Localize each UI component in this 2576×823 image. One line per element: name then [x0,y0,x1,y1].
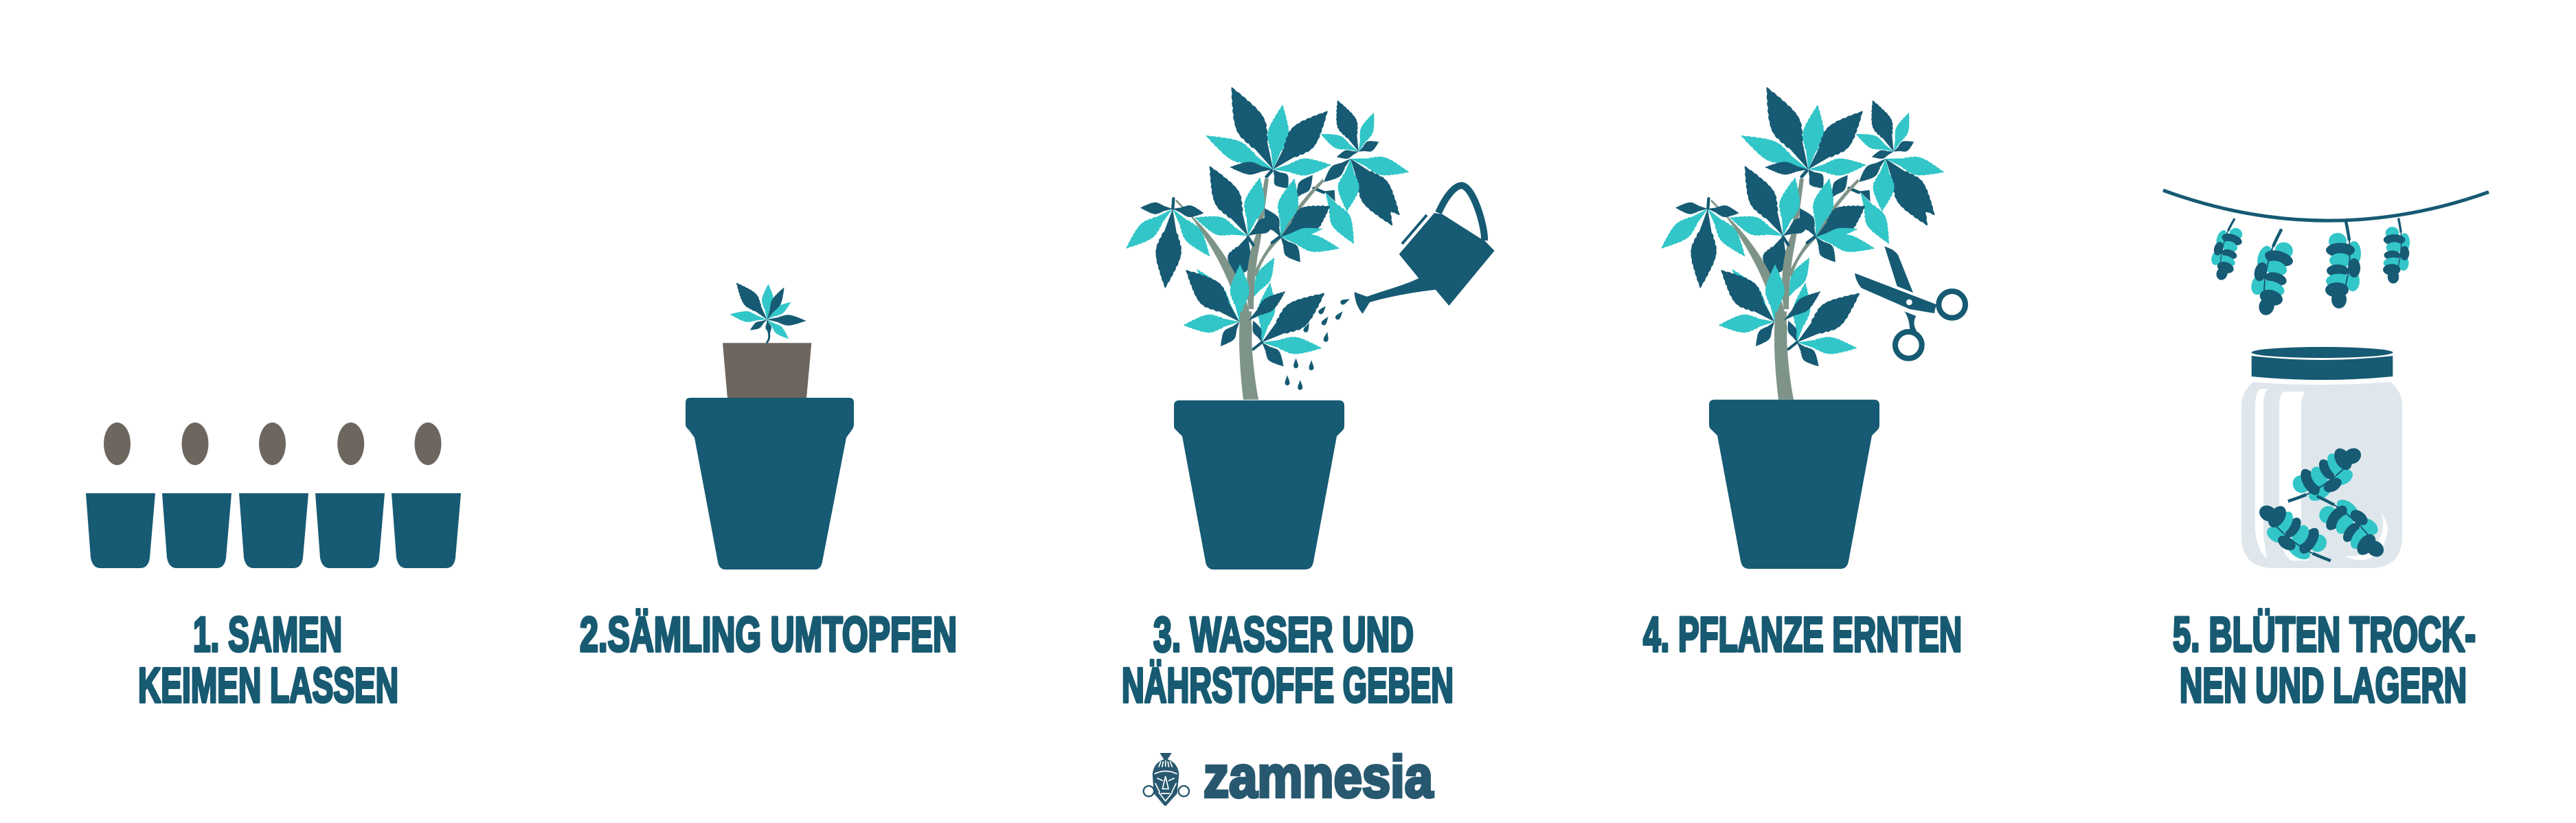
step 2: seedling in pot [686,278,854,570]
jar body [2241,382,2402,568]
hanging bud [2243,225,2301,319]
water drops [1285,297,1351,390]
step 1: seeds and pots [86,422,461,568]
jar lid [2252,347,2393,380]
small pot [315,493,385,568]
heading step 1: KEIMEN LASSEN [138,659,398,713]
wordmark: zamnesia [1204,745,1434,810]
hanging bud [2205,215,2249,283]
icon: tribal mask [1144,753,1189,806]
heading step 1: 1. SAMEN [193,608,342,662]
heading step 5 [2173,608,2476,713]
bud in jar [2278,440,2371,515]
seed [104,422,131,465]
logo: zamnesia [1144,745,1434,810]
heading step 3: 3. WASSER UND [1153,608,1414,662]
bud in jar [2305,484,2395,565]
seed [181,422,209,465]
heading step 2: 2.SÄMLING UMTOPFEN [580,608,957,662]
jar highlights [2255,389,2388,561]
drying rope [2163,190,2489,221]
icon: watering can [1354,185,1495,314]
step 5: drying line and jar [2163,190,2489,574]
pot [1709,400,1879,569]
heading step 3 [1122,608,1454,713]
small pot [162,493,231,568]
seed [259,422,286,465]
hanging bud [2325,221,2361,308]
heading step 3: NÄHRSTOFFE GEBEN [1122,659,1454,713]
icon: scissors [1855,246,1965,359]
small pot [392,493,461,568]
plant [1656,80,1946,400]
seed [415,422,441,465]
small pot [86,493,155,568]
heading step 1 [138,608,398,713]
plant [1120,80,1411,400]
pot [1174,401,1344,570]
step 3: plant with watering can [1120,80,1495,570]
seed [337,422,364,465]
brown inner pot [723,343,811,398]
hanging bud [2383,218,2410,284]
seedling [729,278,806,343]
large pot [686,398,854,570]
step 4: plant with scissors [1656,80,1965,569]
small pot [239,493,308,568]
heading step 4: 4. PFLANZE ERNTEN [1643,608,1962,662]
bud in jar [2249,497,2342,574]
